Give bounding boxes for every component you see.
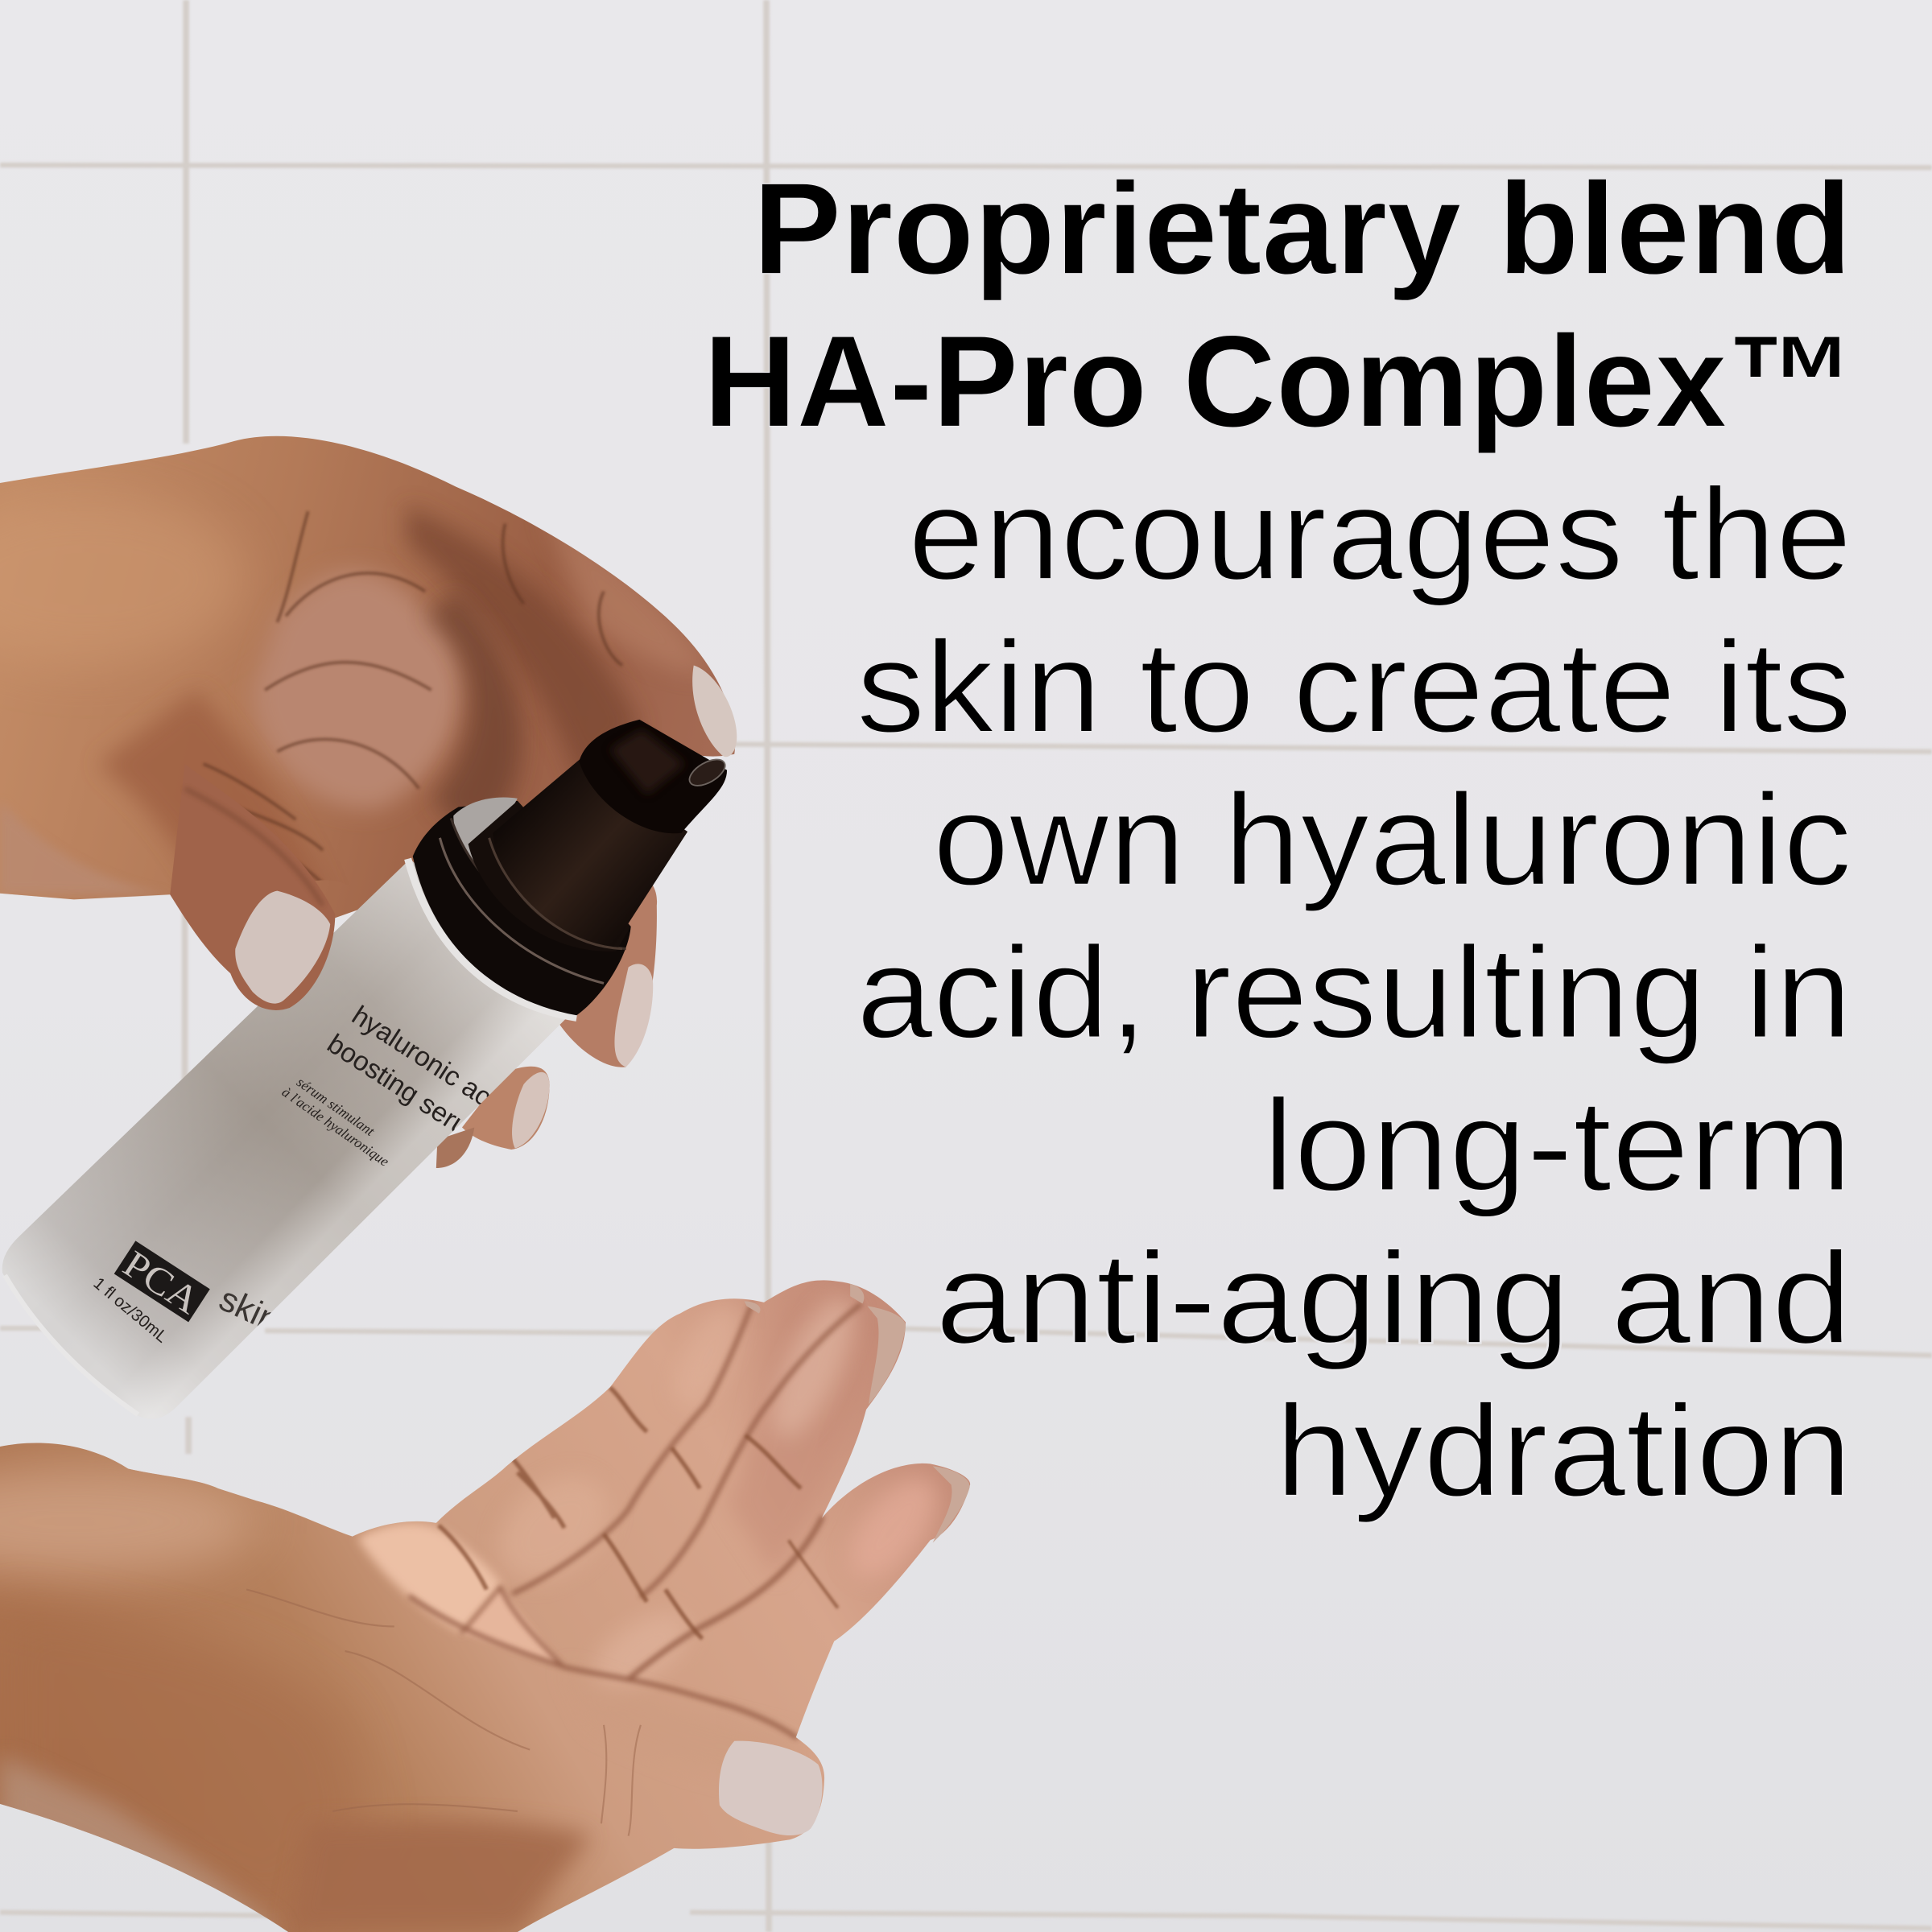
- product label text: à l'acide hyaluronique: [279, 1084, 392, 1170]
- product label text: skin: [213, 1280, 286, 1340]
- nail: index finger: [692, 666, 737, 757]
- bold headline: HA-Pro Complex™: [704, 309, 1856, 455]
- body copy: own hyaluronic: [933, 767, 1852, 913]
- bold headline: [704, 156, 1856, 455]
- thumb of upper hand, in front of bottle: [170, 764, 335, 1010]
- collar inner surface: [453, 798, 518, 862]
- product label text: hyaluronic acid: [346, 1001, 514, 1124]
- body copy: long-term: [1263, 1073, 1852, 1219]
- base highlight: [5, 1275, 138, 1414]
- nail: ring finger: [512, 1072, 550, 1149]
- body copy: acid, resulting in: [857, 920, 1852, 1066]
- PCA logo: PCA: [116, 1243, 207, 1323]
- nail: middle finger: [614, 964, 653, 1067]
- lower open hand: [0, 1280, 970, 1932]
- headline and body copy: [704, 156, 1856, 1524]
- hand silhouette: [0, 436, 735, 936]
- body copy: hydration: [1275, 1378, 1852, 1524]
- product label text: sérum stimulant: [294, 1074, 378, 1140]
- bottle body: [2, 859, 567, 1419]
- product label text: 1 fl oz/30mL: [90, 1274, 171, 1347]
- pump stem: [493, 758, 687, 947]
- black collar: [413, 801, 631, 1015]
- product label text: [90, 1001, 514, 1347]
- nails on lower fingertips: [744, 1284, 970, 1542]
- pump nozzle: [685, 754, 729, 791]
- nail: lower thumb: [719, 1741, 822, 1835]
- finger shading: [733, 1419, 828, 1563]
- nail: thumb: [235, 891, 330, 1004]
- body copy: anti-aging and: [935, 1225, 1852, 1371]
- serum bottle: [2, 720, 729, 1419]
- gaps between fingers: [411, 1305, 860, 1737]
- body copy: skin to create its: [857, 614, 1852, 760]
- product label text: boosting serum: [322, 1029, 493, 1155]
- creases: [204, 511, 622, 887]
- shading on lower hand: [0, 1466, 258, 1577]
- thumb base pad: [357, 1523, 501, 1633]
- upper hand holding the bottle: [0, 436, 737, 1168]
- fingers behind the bottle: [436, 862, 657, 1168]
- collar highlight: [408, 859, 576, 1018]
- body copy: encourages the: [908, 461, 1852, 607]
- finger joint creases: [439, 1387, 838, 1639]
- pump head: [579, 720, 727, 833]
- shading on hand: [5, 510, 240, 654]
- body copy: [857, 461, 1852, 1524]
- bold headline: Proprietary blend: [753, 156, 1852, 302]
